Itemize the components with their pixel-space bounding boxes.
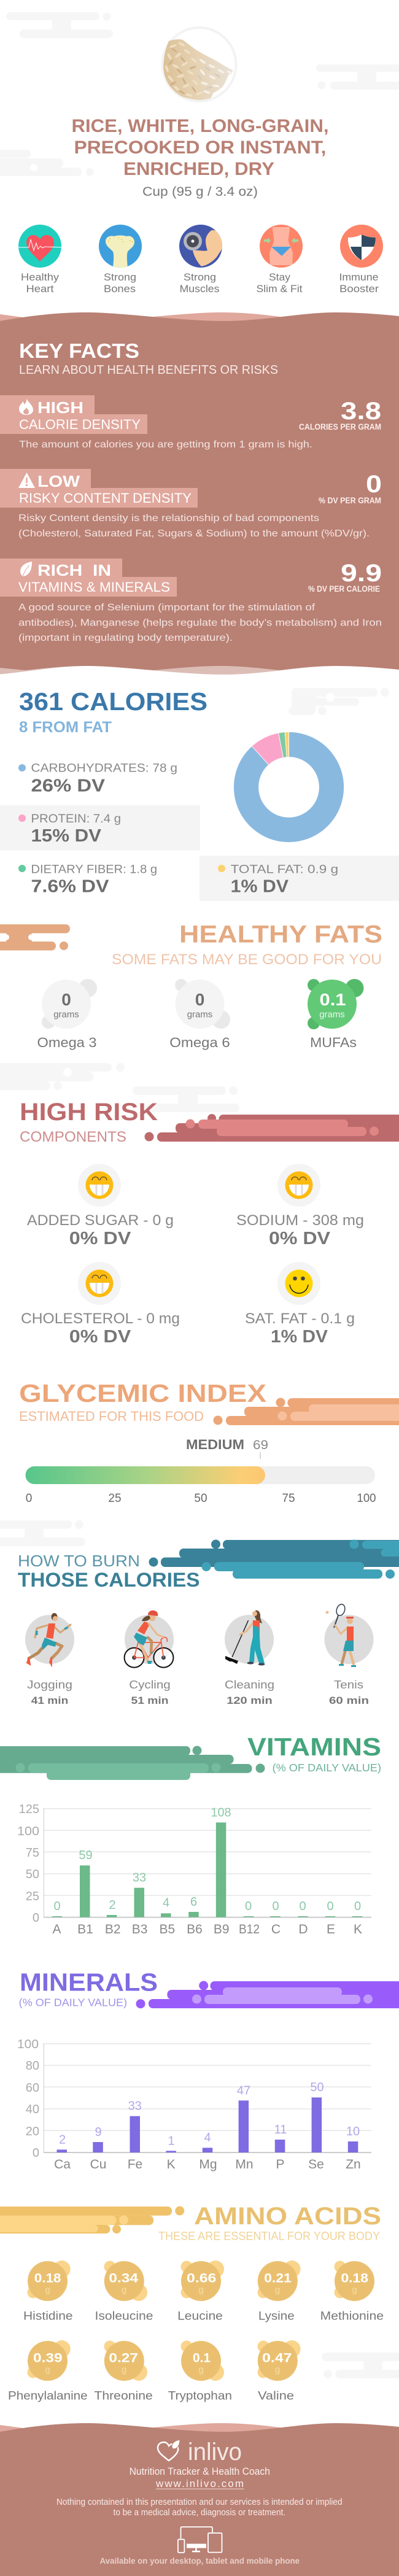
stat: omega 6: Omega 6 [169, 1035, 230, 1050]
icon: leaf [20, 562, 32, 576]
stat: omega 6: grams [187, 1010, 212, 1020]
fact: rich in vitamins and minerals: % DV PER CALORIE [308, 584, 380, 594]
amino acid: valine: g [275, 2365, 280, 2375]
bar chart: vitamins: 0 [245, 1900, 252, 1913]
title [71, 116, 329, 179]
amino acid: threonine: Threonine [94, 2390, 153, 2403]
panel: footer [0, 2423, 399, 2576]
text: availability: Available on your desktop, tablet and mobile phone [100, 2556, 300, 2566]
legend: total fat: TOTAL FAT: 0.9 g [231, 864, 338, 876]
icon: flame [19, 398, 33, 415]
bar chart: minerals: Mg [199, 2157, 217, 2172]
bar chart: vitamins [17, 1803, 371, 1936]
title: PRECOOKED OR INSTANT, [74, 137, 327, 158]
bar chart: minerals: Zn [346, 2157, 361, 2172]
icon: grinning face [78, 1262, 121, 1305]
label: jogging: 41 min [31, 1695, 68, 1706]
bar chart: minerals: K [167, 2157, 176, 2172]
logo: inlivo [158, 2439, 242, 2466]
bar chart: minerals: 60 [26, 2081, 39, 2095]
label: stay slim and fit: Stay [269, 271, 290, 283]
legend: dietary fiber: DIETARY FIBER: 1.8 g [31, 864, 157, 876]
bar chart: vitamins: 108 [211, 1806, 231, 1819]
component: saturated fat: SAT. FAT - 0.1 g [245, 1310, 355, 1327]
icon: healthy heart [18, 225, 61, 268]
legend: protein: PROTEIN: 7.4 g [31, 813, 121, 826]
bar chart: minerals: 47 [237, 2084, 250, 2097]
decoration: healthy fats band [0, 924, 70, 950]
amino acid: phenylalanine: 0.39 [33, 2351, 63, 2365]
amino acid: tryptophan: Tryptophan [168, 2390, 232, 2403]
fact: rich in vitamins and minerals: VITAMINS & MINERALS [18, 579, 170, 595]
component: cholesterol [21, 1262, 180, 1347]
label: strong muscles: Muscles [179, 283, 220, 295]
stat: omega 3: 0 [61, 990, 71, 1009]
amino acid: valine: Valine [258, 2390, 294, 2403]
amino acid: methionine: g [352, 2285, 357, 2296]
icon: strong muscles [179, 225, 223, 268]
fact: rich in vitamins and minerals: RICH IN [37, 561, 111, 579]
amino acid: tryptophan: g [198, 2365, 204, 2375]
bar chart: minerals: 4 [204, 2131, 211, 2145]
fact: low risky content density [0, 469, 382, 539]
component: added sugar: 0% DV [69, 1229, 131, 1248]
amino acid: histidine [23, 2261, 73, 2323]
heading: healthy fats: SOME FATS MAY BE GOOD FOR YOU [112, 951, 382, 968]
component: sodium: 0% DV [269, 1229, 331, 1248]
bar chart: vitamins: 0 [33, 1911, 39, 1925]
bar chart: minerals: 11 [274, 2123, 287, 2137]
text: disclaimer: Nothing contained in this presentation and our services is intended or implied [56, 2497, 343, 2507]
amino acid: phenylalanine: Phenylalanine [8, 2390, 88, 2403]
chart: glycemic index gauge [26, 1437, 376, 1505]
amino acid: isoleucine: g [122, 2285, 126, 2296]
label: jogging: Jogging [27, 1679, 72, 1691]
fact: high calorie density [0, 395, 381, 450]
heading: vitamins [247, 1733, 381, 1774]
bar chart: vitamins: B12 [239, 1922, 260, 1936]
component: sodium [236, 1164, 364, 1248]
fact: high calorie density: The amount of calories you are getting from 1 gram is high. [19, 439, 312, 450]
fact: low risky content density: % DV PER GRAM [319, 496, 381, 505]
amino acid: leucine: 0.66 [187, 2271, 216, 2286]
label: tennis: 60 min [329, 1695, 369, 1706]
bar chart: minerals: 2 [59, 2133, 66, 2146]
bar chart: vitamins: 0 [354, 1900, 361, 1913]
heading: minerals: MINERALS [20, 1968, 158, 1996]
stat: MUFAs: MUFAs [310, 1035, 357, 1050]
label: stay slim and fit: Slim & Fit [257, 283, 303, 295]
component: saturated fat: 1% DV [271, 1327, 328, 1347]
amino acid: valine [258, 2340, 301, 2403]
heading: calories: 8 FROM FAT [19, 719, 112, 736]
heading: glycemic index: GLYCEMIC INDEX [19, 1379, 266, 1407]
fact: rich in vitamins and minerals: (important in regulating body temperature). [18, 633, 233, 643]
heading: how to burn those calories: THOSE CALORIES [18, 1569, 200, 1591]
decoration: vitamins band [0, 1746, 265, 1780]
bar chart: minerals: Fe [128, 2157, 142, 2172]
bar chart: vitamins: 59 [79, 1849, 93, 1862]
stat: MUFAs: 0.1 [319, 990, 346, 1009]
fact: rich in vitamins and minerals [0, 559, 382, 643]
heading: key facts [19, 339, 278, 377]
bar chart: minerals: 10 [346, 2125, 360, 2138]
food image: rice in circle [162, 28, 236, 101]
bar chart: minerals: Cu [90, 2157, 106, 2172]
amino acid: isoleucine [95, 2261, 153, 2323]
label: immune booster [339, 271, 379, 295]
heading: glycemic index: ESTIMATED FOR THIS FOOD [19, 1409, 204, 1424]
label: tennis [329, 1679, 369, 1706]
bar chart: vitamins: B9 [214, 1922, 230, 1936]
fact: rich in vitamins and minerals: 9.9 [341, 560, 382, 587]
label: cleaning: Cleaning [225, 1679, 274, 1691]
chart: glycemic index gauge: 0 [26, 1492, 32, 1505]
bar chart: minerals: 50 [310, 2081, 324, 2094]
amino acid: isoleucine: Isoleucine [95, 2310, 153, 2323]
heading: high risk components: COMPONENTS [20, 1129, 126, 1145]
chart: glycemic index gauge: 25 [108, 1492, 122, 1505]
component: cholesterol: CHOLESTEROL - 0 mg [21, 1310, 180, 1327]
heading: calories: 361 CALORIES [19, 687, 207, 716]
heading: glycemic index [19, 1379, 266, 1424]
bar chart: vitamins: B6 [187, 1922, 203, 1936]
bar chart: vitamins: 4 [163, 1897, 169, 1910]
bar chart: vitamins: 0 [53, 1900, 61, 1913]
decoration: burn band [149, 1539, 399, 1579]
legend: dietary fiber [18, 864, 157, 897]
chart: glycemic index gauge: MEDIUM [186, 1437, 244, 1452]
heading: amino acids: AMINO ACIDS [194, 2203, 381, 2230]
stat: omega 6 [169, 979, 230, 1050]
bar chart: minerals: P [276, 2157, 285, 2172]
bar chart: minerals [17, 2038, 371, 2172]
fact: high calorie density: 3.8 [341, 398, 381, 425]
background decoration: clouds above high risk [0, 1063, 239, 1112]
component: added sugar [27, 1164, 174, 1248]
amino acid: leucine: Leucine [177, 2310, 223, 2323]
label: cycling [129, 1679, 171, 1706]
bar chart: vitamins: 0 [272, 1900, 279, 1913]
amino acid: leucine: g [198, 2285, 204, 2296]
heading: vitamins: (% OF DAILY VALUE) [273, 1762, 381, 1774]
background decoration: cloud top left [6, 12, 113, 38]
amino acid: lysine: g [275, 2285, 280, 2296]
bar chart: vitamins: K [354, 1922, 362, 1936]
label: immune booster: Booster [339, 283, 379, 295]
amino acid: histidine: Histidine [23, 2310, 73, 2323]
label: strong bones: Bones [104, 283, 136, 295]
icon: devices [178, 2527, 222, 2553]
bar chart: vitamins: C [271, 1922, 281, 1936]
label: strong bones [104, 271, 136, 295]
title: ENRICHED, DRY [123, 159, 274, 179]
icon: stay slim and fit [260, 225, 303, 268]
stat: MUFAs [308, 979, 363, 1050]
amino acid: valine: 0.47 [262, 2351, 292, 2365]
activity: jogging [25, 1613, 74, 1665]
heading: key facts: KEY FACTS [19, 339, 139, 362]
heading: high risk components: HIGH RISK [20, 1099, 158, 1126]
label: strong muscles [179, 271, 220, 295]
heading: amino acids [158, 2203, 381, 2243]
amino acid: lysine: Lysine [258, 2310, 295, 2323]
heading: high risk components [20, 1099, 158, 1145]
amino acid: isoleucine: 0.34 [109, 2271, 138, 2286]
heading: amino acids: THESE ARE ESSENTIAL FOR YOUR BODY [158, 2229, 380, 2243]
label: strong muscles: Strong [184, 271, 216, 283]
icon: strong bones [99, 225, 142, 268]
text: disclaimer: to be a medical advice, diagnosis or treatment. [114, 2508, 285, 2518]
fact: high calorie density: HIGH [37, 398, 83, 417]
activity: cycling [125, 1611, 174, 1668]
heading: calories [19, 687, 207, 736]
bar chart: vitamins: 0 [299, 1900, 306, 1913]
bar chart: minerals: 0 [33, 2146, 39, 2160]
label: immune booster: Immune [339, 271, 378, 283]
bar chart: minerals: 40 [26, 2103, 39, 2116]
bar chart: vitamins: E [327, 1922, 335, 1936]
fact: low risky content density: RISKY CONTENT DENSITY [19, 490, 192, 506]
donut chart: macronutrients [234, 732, 344, 843]
fact: high calorie density: CALORIES PER GRAM [299, 422, 381, 431]
bar chart: vitamins: 2 [109, 1898, 116, 1912]
bar chart: vitamins: 100 [17, 1825, 39, 1838]
heading: minerals: (% OF DAILY VALUE) [19, 1997, 127, 2009]
component: saturated fat [245, 1262, 355, 1347]
bar chart: minerals: Ca [54, 2157, 71, 2172]
fact: low risky content density: Risky Content density is the relationship of bad components [18, 513, 319, 524]
icon: grinning face [277, 1164, 320, 1207]
bar chart: vitamins: D [298, 1922, 308, 1936]
icon: smiling face [277, 1262, 320, 1305]
serving size: Cup (95 g / 3.4 oz) [142, 185, 258, 199]
decoration: amino acids band [0, 2206, 184, 2234]
amino acid: lysine: 0.21 [264, 2271, 292, 2286]
component: added sugar: ADDED SUGAR - 0 g [27, 1212, 174, 1229]
legend: protein [0, 805, 200, 851]
bar chart: minerals: 9 [95, 2125, 102, 2139]
bar chart: vitamins: B1 [77, 1922, 93, 1936]
bar chart: vitamins: B5 [160, 1922, 175, 1936]
fact: high calorie density: CALORIE DENSITY [19, 417, 141, 432]
amino acid: histidine: g [45, 2285, 50, 2296]
bar chart: vitamins: 25 [26, 1890, 39, 1903]
amino acid: histidine: 0.18 [34, 2271, 61, 2286]
bar chart: vitamins: 75 [26, 1846, 39, 1860]
logo: inlivo: inlivo [188, 2439, 242, 2466]
amino acid: threonine: 0.27 [109, 2351, 138, 2365]
bar chart: vitamins: 6 [190, 1895, 197, 1909]
bar chart: vitamins: B2 [105, 1922, 121, 1936]
bar chart: minerals: 100 [17, 2038, 39, 2051]
legend: carbohydrates: CARBOHYDRATES: 78 g [31, 762, 177, 775]
legend: dietary fiber: 7.6% DV [31, 877, 109, 897]
bar chart: minerals: Se [308, 2157, 324, 2172]
fact: rich in vitamins and minerals: A good source of Selenium (important for the stimulation of [18, 603, 316, 613]
fact: low risky content density: LOW [37, 472, 80, 490]
amino acid: methionine [320, 2261, 384, 2323]
legend: carbohydrates: 26% DV [31, 776, 106, 795]
bar chart: vitamins: 0 [327, 1900, 334, 1913]
fact: rich in vitamins and minerals: antibodies), Manganese (helps regulate the body’s metabolism) and Iron [18, 617, 382, 629]
component: sodium: SODIUM - 308 mg [236, 1212, 364, 1229]
amino acid: threonine: g [122, 2365, 126, 2375]
label: jogging [27, 1679, 72, 1706]
amino acid: phenylalanine [8, 2340, 88, 2403]
label: strong bones: Strong [104, 271, 136, 283]
amino acid: tryptophan [168, 2341, 232, 2403]
amino acid: threonine [94, 2341, 153, 2403]
legend: total fat: 1% DV [231, 877, 289, 897]
bar chart: minerals: 33 [128, 2100, 142, 2113]
label: tennis: Tenis [334, 1679, 363, 1691]
decoration: minerals band [136, 1981, 399, 2008]
background decoration: cloud right [316, 64, 399, 90]
label: cleaning: 120 min [227, 1695, 273, 1706]
label: stay slim and fit [257, 271, 303, 295]
legend: total fat [200, 856, 399, 901]
icon: grinning face [78, 1164, 121, 1207]
bar chart: minerals: Mn [235, 2157, 254, 2172]
label: cycling: Cycling [129, 1679, 171, 1691]
text: disclaimer [56, 2497, 343, 2518]
background decoration: cloud near calories [289, 688, 389, 715]
chart: glycemic index gauge: 75 [282, 1492, 295, 1505]
bar chart: vitamins: 33 [133, 1871, 146, 1885]
amino acid: tryptophan: 0.1 [193, 2351, 211, 2365]
legend: carbohydrates [18, 762, 177, 795]
stat: omega 3: Omega 3 [37, 1035, 97, 1050]
label: healthy heart [21, 271, 60, 295]
background decoration: cloud left [0, 150, 93, 176]
chart: glycemic index gauge: 69 [253, 1438, 268, 1452]
heading: healthy fats [112, 921, 382, 968]
decoration: glycemic band [214, 1398, 399, 1425]
chart: glycemic index gauge: 50 [194, 1492, 207, 1505]
icon: immune booster [340, 225, 383, 268]
heading: key facts: LEARN ABOUT HEALTH BENEFITS OR RISKS [19, 363, 278, 377]
amino acid: lysine [258, 2261, 301, 2323]
label: cycling: 51 min [131, 1695, 168, 1706]
bar chart: minerals: 1 [168, 2134, 175, 2148]
component: cholesterol: 0% DV [69, 1327, 131, 1347]
label: healthy heart: Healthy [21, 271, 60, 283]
activity: cleaning [225, 1611, 274, 1666]
bar chart: minerals: 80 [26, 2059, 39, 2073]
bar chart: vitamins: B3 [132, 1922, 147, 1936]
heading: healthy fats: HEALTHY FATS [179, 921, 382, 948]
stat: omega 6: 0 [195, 990, 204, 1009]
amino acid: leucine [177, 2261, 224, 2323]
heading: how to burn those calories: HOW TO BURN [18, 1552, 140, 1570]
stat: omega 3: grams [53, 1010, 79, 1020]
amino acid: phenylalanine: g [45, 2365, 50, 2375]
amino acid: methionine: 0.18 [341, 2271, 368, 2286]
title: RICE, WHITE, LONG-GRAIN, [71, 116, 329, 136]
heading: how to burn those calories [18, 1552, 200, 1591]
legend: protein: 15% DV [31, 826, 102, 846]
heading: minerals [19, 1968, 158, 2009]
activity: tennis [324, 1603, 373, 1667]
fact: low risky content density: 0 [366, 471, 382, 498]
bar chart: vitamins: 50 [26, 1868, 39, 1881]
panel: key facts [0, 312, 399, 675]
amino acid: methionine: Methionine [320, 2310, 384, 2323]
heading: vitamins: VITAMINS [247, 1733, 381, 1761]
label: cleaning [225, 1679, 274, 1706]
background decoration: cloud above burn [0, 1520, 85, 1546]
stat: omega 3 [37, 979, 97, 1050]
text: tagline and url: www.inlivo.com [155, 2478, 244, 2489]
chart: glycemic index gauge: 100 [357, 1492, 376, 1505]
text: tagline and url: Nutrition Tracker & Health Coach [130, 2466, 270, 2477]
fact: low risky content density: (Cholesterol, Saturated Fat, Sugars & Sodium) to the amount (%DV/gr). [18, 528, 370, 539]
bar chart: vitamins: A [52, 1922, 61, 1936]
label: healthy heart: Heart [26, 283, 54, 295]
text: tagline and url [130, 2466, 270, 2489]
bar chart: vitamins: 125 [19, 1803, 39, 1816]
icon: warning triangle [18, 473, 35, 488]
background decoration: cloud right of amino acids [322, 2353, 399, 2378]
decoration: high risk band [145, 1114, 399, 1142]
stat: MUFAs: grams [319, 1010, 345, 1020]
bar chart: minerals: 20 [26, 2125, 39, 2138]
